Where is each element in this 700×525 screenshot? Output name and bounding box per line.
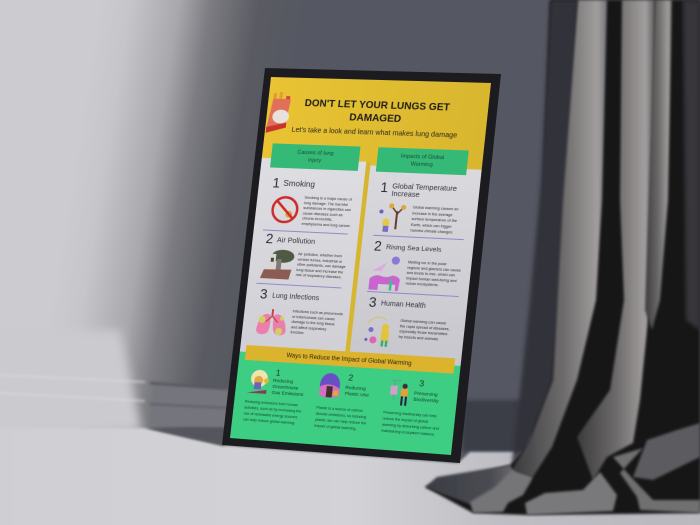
text: global temperature: Earth, which can trigger — [411, 222, 452, 229]
heading: lung infections: Lung Infections — [272, 291, 320, 302]
heading: rising sea levels: Rising Sea Levels — [386, 243, 442, 253]
heading: global temperature increase: Increase — [391, 190, 420, 199]
text: lung infections: Infections such as pneumonia — [293, 309, 343, 316]
text: greenhouse gas: use of renewable energy sources — [243, 411, 298, 419]
heading: reducing greenhouse gas emissions: Greenhouse — [272, 384, 299, 391]
banner: ways to reduce — [245, 345, 455, 374]
text: air pollution: vehicle fumes, industrial or — [297, 257, 342, 264]
text: greenhouse gas: activities, such as by increasing the — [244, 405, 302, 414]
text: plastic use: Plastic is a source of carbon — [316, 405, 363, 413]
text: air pollution — [296, 252, 346, 280]
number 1: 1 — [380, 180, 389, 195]
title: DAMAGED — [349, 112, 402, 124]
text: lung infections: damage to the lung tissue — [291, 319, 335, 326]
icon: tree and figure — [379, 203, 406, 232]
icon: greenhouse gas figure — [246, 370, 270, 394]
poster — [230, 77, 491, 455]
heading: reducing greenhouse gas emissions: Gas Emissions — [271, 390, 304, 398]
number 3: 3 — [368, 295, 377, 310]
divider — [373, 235, 464, 240]
number 2: 2 — [348, 373, 354, 383]
text: global temperature: Global warming causes an — [413, 205, 459, 211]
text: greenhouse gas: Reducing emissions from human — [245, 399, 298, 407]
header: impacts of global warming: Warming — [410, 161, 433, 168]
text: smoking: emphysema and lung cancer. — [301, 221, 351, 228]
item: lung infections — [256, 251, 343, 336]
header: causes of lung injury: Causes of lung — [297, 149, 334, 157]
icon: lungs and cigarettes — [266, 92, 291, 133]
text: air pollution: other pollutants, can damage — [297, 262, 346, 269]
text: global temperature: surface temperature of the — [411, 216, 457, 223]
banner: ways to reduce: Ways to Reduce the Impact of Global Warming — [286, 352, 412, 367]
text: global temperature — [410, 205, 459, 235]
item: global temperature — [379, 180, 459, 235]
item: biodiversity — [381, 379, 439, 437]
icon: biodiversity figure — [390, 380, 408, 406]
text: human health: by insects and animals. — [399, 334, 439, 341]
item: smoking — [271, 175, 352, 228]
icon: person and virus — [364, 316, 390, 347]
icon: melting ice — [368, 256, 400, 292]
icon: factory and smoke — [260, 250, 294, 280]
number 3: 3 — [419, 379, 425, 389]
heading: smoking: Smoking — [283, 179, 315, 189]
right white panel — [348, 165, 482, 373]
frame shadow — [145, 428, 230, 446]
heading: global temperature increase: Global Temperature — [392, 182, 457, 193]
text: global temperature: increase in the average — [412, 211, 453, 217]
divider — [367, 291, 459, 297]
title: DON'T LET YOUR LUNGS GET — [304, 98, 450, 113]
text: rising sea levels: ocean ecosystems. — [405, 281, 439, 287]
text: rising sea levels: impact human well-being and — [406, 276, 457, 283]
text: greenhouse gas: can help reduce global warming. — [243, 417, 296, 425]
heading: preserving biodiversity: Preserving — [414, 391, 438, 398]
skirting board — [0, 375, 230, 428]
text: plastic use — [314, 383, 367, 431]
header: causes of lung injury: injury — [308, 157, 321, 163]
icon: plastic figure — [318, 373, 340, 398]
divider — [263, 229, 348, 235]
heading: reducing plastic use — [344, 385, 369, 398]
heading: preserving biodiversity: Biodiversity — [413, 397, 439, 404]
text: human health: especially those transmitted — [399, 329, 447, 336]
text: biodiversity: warming by absorbing carbon and — [382, 422, 439, 431]
yellow column divider — [344, 162, 371, 362]
text: greenhouse gas — [242, 377, 302, 426]
heading: preserving biodiversity — [413, 391, 439, 404]
text: lung infections: and affect respiratory — [291, 325, 327, 331]
number 3: 3 — [259, 286, 268, 302]
text: plastic use: impact of global warming. — [314, 423, 357, 431]
skirting right — [462, 400, 535, 452]
floor — [0, 428, 700, 525]
text: human health: Global warming can cause — [400, 318, 446, 325]
text: rising sea levels — [405, 260, 461, 287]
icon: no smoking — [271, 196, 299, 224]
item: human health — [364, 295, 450, 347]
text: biodiversity — [381, 410, 439, 437]
text: air pollution: risk of respiratory diseases. — [296, 273, 342, 280]
text: rising sea levels: Melting ice in the polar — [408, 260, 447, 266]
text: biodiversity: reduce the impact of global — [382, 416, 428, 424]
curtain — [425, 0, 700, 515]
icon: infected lungs — [256, 251, 286, 336]
heading: reducing greenhouse gas emissions: Reducing — [273, 378, 293, 385]
item: greenhouse gas — [242, 368, 304, 426]
text: rising sea levels: sea levels to rise, which can — [407, 270, 455, 278]
text: lung infections — [276, 251, 343, 335]
number 2: 2 — [265, 231, 274, 246]
picture frame — [222, 68, 501, 463]
text: smoking: cause diseases such as — [303, 211, 343, 217]
text: plastic use: plastic use can help reduce the — [315, 417, 367, 425]
header: impacts of global warming — [376, 147, 469, 175]
heading: reducing plastic use: Plastic Use — [344, 391, 369, 398]
title — [304, 98, 450, 124]
left white panel — [239, 158, 366, 362]
yellow header background — [260, 77, 491, 179]
item: plastic use — [314, 373, 369, 431]
heading: global temperature increase — [391, 182, 457, 199]
text: smoking: lung damage. The harmful — [304, 200, 348, 207]
text: smoking: Smoking is a major cause of — [304, 195, 352, 202]
text: lung infections: or tuberculosis can cause — [292, 314, 335, 321]
item: air pollution — [260, 231, 346, 280]
subtitle: Let's take a look and learn what makes lung damage — [291, 126, 458, 139]
text: air pollution: Air pollution, whether from — [298, 252, 342, 258]
text: smoking — [301, 195, 352, 228]
text: rising sea levels: regions and glaciers can cause — [407, 265, 461, 272]
text: biodiversity: Preserving biodiversity can help — [383, 410, 437, 418]
item: rising sea levels — [368, 238, 461, 292]
light patch on lower wall — [0, 330, 142, 432]
heading: air pollution: Air Pollution — [277, 236, 316, 246]
header: causes of lung injury — [270, 143, 360, 171]
heading: reducing plastic use: Reducing — [345, 385, 366, 392]
heading: human health: Human Health — [381, 299, 426, 309]
text: human health: the rapid spread of diseases, — [400, 324, 450, 331]
divider — [256, 283, 341, 288]
text: lung infections: function. — [290, 330, 305, 335]
header: impacts of global warming: Impacts of Global — [400, 153, 445, 161]
heading: reducing greenhouse gas emissions — [271, 378, 304, 398]
green footer background — [230, 352, 461, 455]
text: biodiversity: maintaining ecosystem balance. — [381, 428, 435, 437]
text: smoking: chronic bronchitis, — [302, 216, 333, 222]
number 1: 1 — [272, 175, 281, 191]
text: human health — [398, 318, 450, 341]
text: air pollution: lung tissue and increase the — [296, 267, 344, 274]
text: plastic use: dioxide emissions, so reducing — [316, 411, 367, 419]
text: global temperature: harmful climate changes. — [410, 228, 454, 235]
text: smoking: substances in cigarettes can — [303, 206, 351, 212]
number 1: 1 — [275, 368, 281, 378]
number 2: 2 — [373, 238, 383, 254]
